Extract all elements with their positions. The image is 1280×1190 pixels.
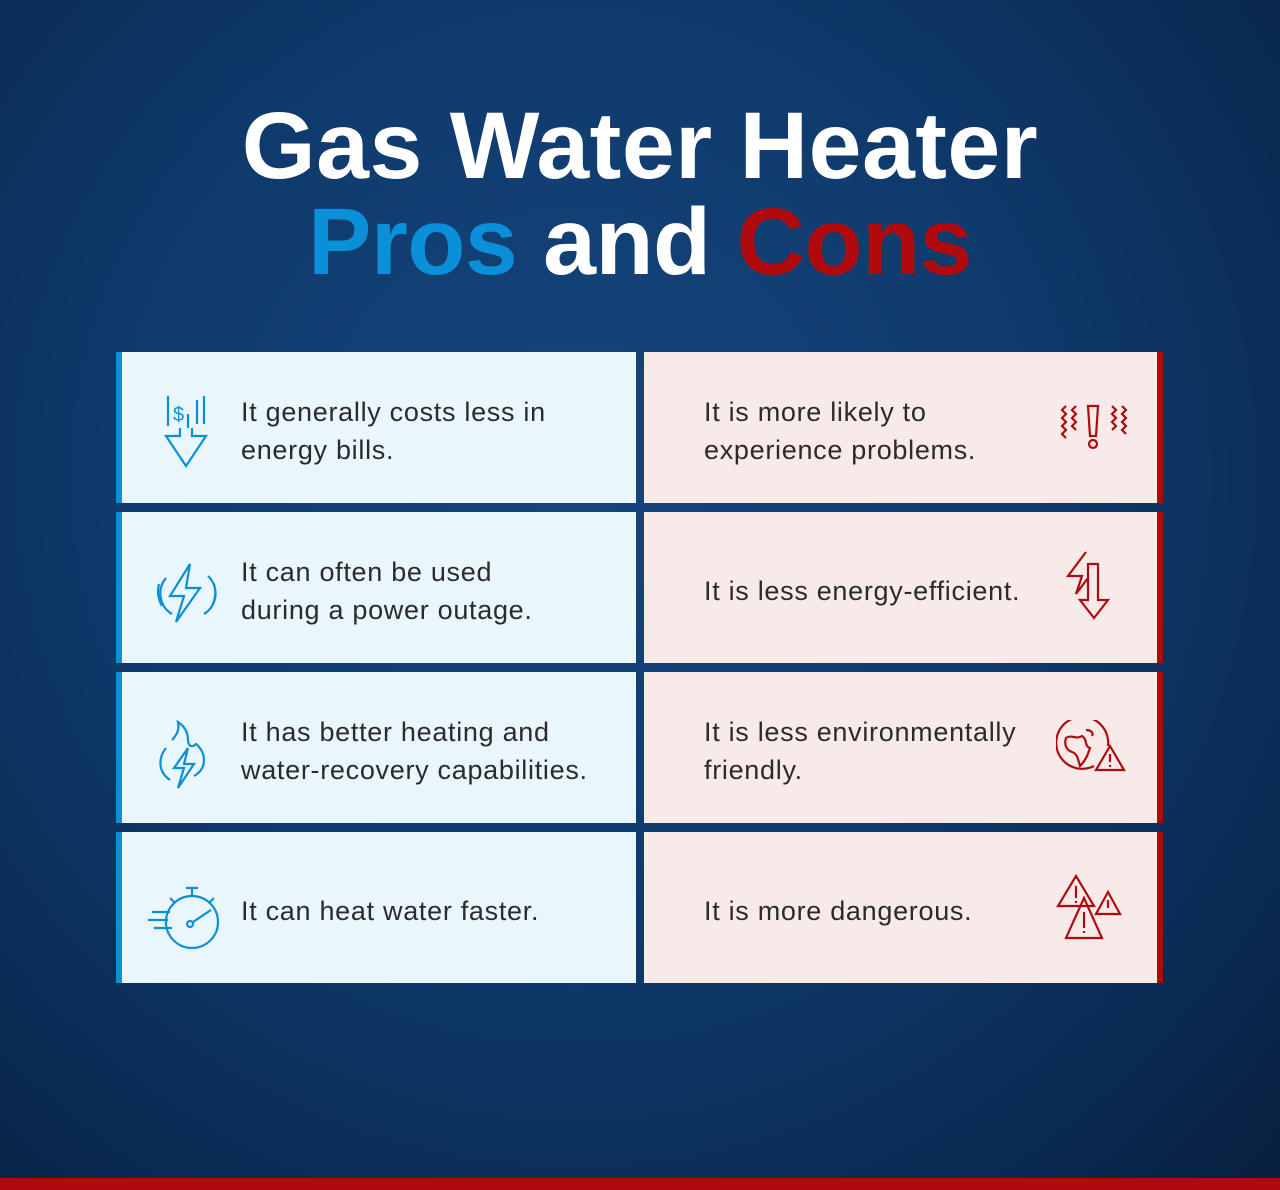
con card 3 [644, 672, 1163, 823]
title: Pros and Cons [308, 189, 972, 295]
con card 1 [644, 352, 1163, 503]
icon: dollar down arrow [164, 396, 208, 468]
bottom bar [0, 1178, 1280, 1190]
icon: flame bolt [159, 720, 206, 789]
text: It is less energy-efficient. [704, 576, 1020, 606]
text: It is more dangerous. [704, 896, 972, 926]
text: friendly. [704, 755, 803, 785]
text [241, 397, 546, 465]
text: It is less environmentally [704, 717, 1016, 747]
text: water-recovery capabilities. [241, 755, 588, 785]
con card 2 [644, 512, 1163, 663]
text [241, 557, 533, 625]
text: It can heat water faster. [241, 896, 539, 926]
text: It has better heating and [241, 717, 550, 747]
text: It is more likely to [704, 397, 927, 427]
text: experience problems. [704, 435, 976, 465]
icon: shaking exclamation [1060, 404, 1128, 450]
con card 4 [644, 832, 1163, 983]
title: Gas Water Heater [242, 93, 1038, 199]
icon: globe warning [1056, 720, 1126, 772]
text: It generally costs less in [241, 397, 546, 427]
pro card 3 [116, 672, 636, 823]
title [242, 93, 1038, 295]
pro card 2 [116, 512, 636, 663]
text: energy bills. [241, 435, 394, 465]
text [241, 717, 588, 785]
icon: stopwatch [148, 886, 220, 950]
icon: bolt down arrow [1066, 551, 1110, 620]
icon: dollar down arrow: $ [173, 404, 184, 426]
pro card 1 [116, 352, 636, 503]
icon: bolt [156, 563, 217, 623]
text: during a power outage. [241, 595, 533, 625]
text [704, 717, 1016, 785]
text: It can often be used [241, 557, 492, 587]
text [704, 397, 976, 465]
icon: warning triangles [1056, 874, 1122, 940]
pro card 4 [116, 832, 636, 983]
